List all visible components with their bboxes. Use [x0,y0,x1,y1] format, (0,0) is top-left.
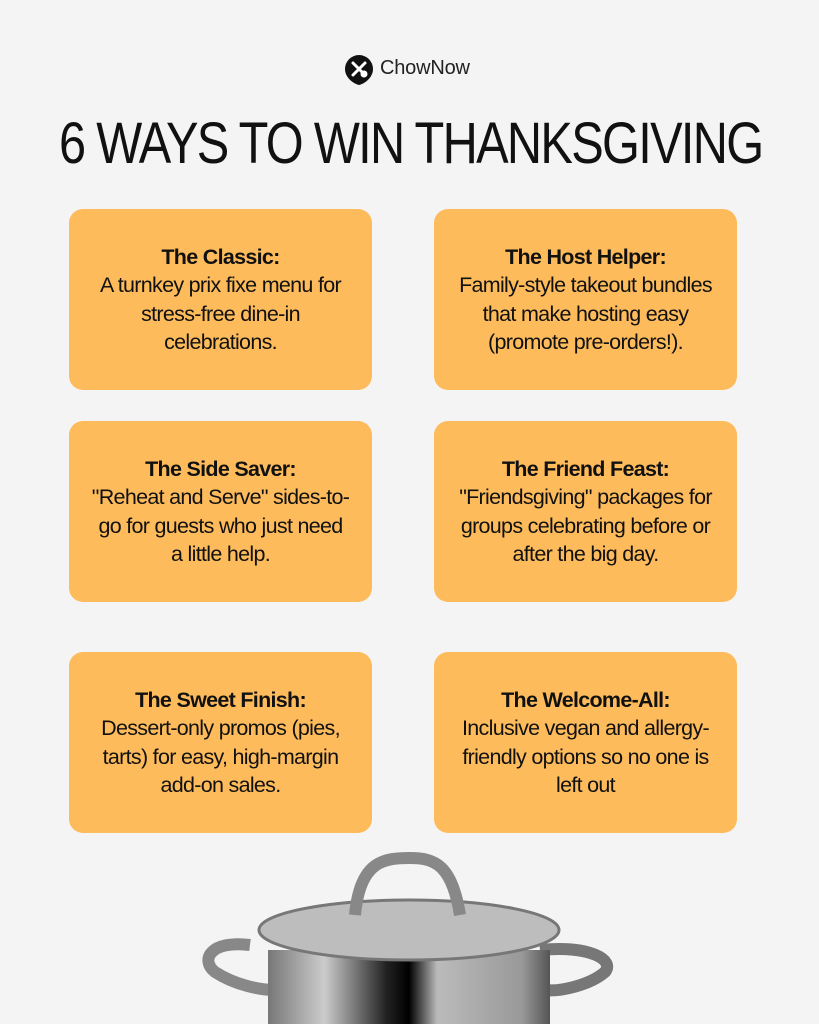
panel: sweet finish [69,652,372,833]
panel: welcome-all: left out [556,773,615,797]
icon: logo badge [345,55,373,85]
panel: host helper: The Host Helper: [505,244,666,268]
panel: the classic: stress-free dine-in [141,302,300,326]
panel: welcome-all: friendly options so no one is [462,744,709,768]
panel: side saver: a little help. [171,542,270,566]
panel: side saver [69,421,372,602]
panel: welcome-all [434,652,737,833]
panel: friend feast [434,421,737,602]
panel: side saver: The Side Saver: [145,456,296,480]
panel: the classic: A turnkey prix fixe menu for [100,273,341,297]
panel: host helper: (promote pre-orders!). [488,330,683,354]
logo [345,55,470,85]
title: 6 WAYS TO WIN THANKSGIVING [59,111,762,176]
panel: the classic [69,209,372,390]
logo text: ChowNow [380,57,470,79]
panel: host helper: Family-style takeout bundles [459,273,712,297]
panel: host helper [434,209,737,390]
panel: sweet finish: tarts) for easy, high-margin [103,744,338,768]
panel: friend feast: groups celebrating before or [461,514,710,538]
panel: welcome-all: Inclusive vegan and allergy- [462,716,709,740]
panel: welcome-all: The Welcome-All: [501,688,670,712]
panel: friend feast: after the big day. [513,542,658,566]
panel: friend feast: "Friendsgiving" packages for [459,485,712,509]
panel: sweet finish: Dessert-only promos (pies, [101,716,340,740]
panel: friend feast: The Friend Feast: [502,456,669,480]
panel: sweet finish: The Sweet Finish: [135,688,306,712]
panel: side saver: "Reheat and Serve" sides-to- [92,485,349,509]
panel: sweet finish: add-on sales. [160,773,280,797]
illustration: pot [202,852,614,1024]
panel: side saver: go for guests who just need [98,514,343,538]
panel: the classic: celebrations. [164,330,277,354]
panel: the classic: The Classic: [161,244,280,268]
panel: host helper: that make hosting easy [483,302,688,326]
